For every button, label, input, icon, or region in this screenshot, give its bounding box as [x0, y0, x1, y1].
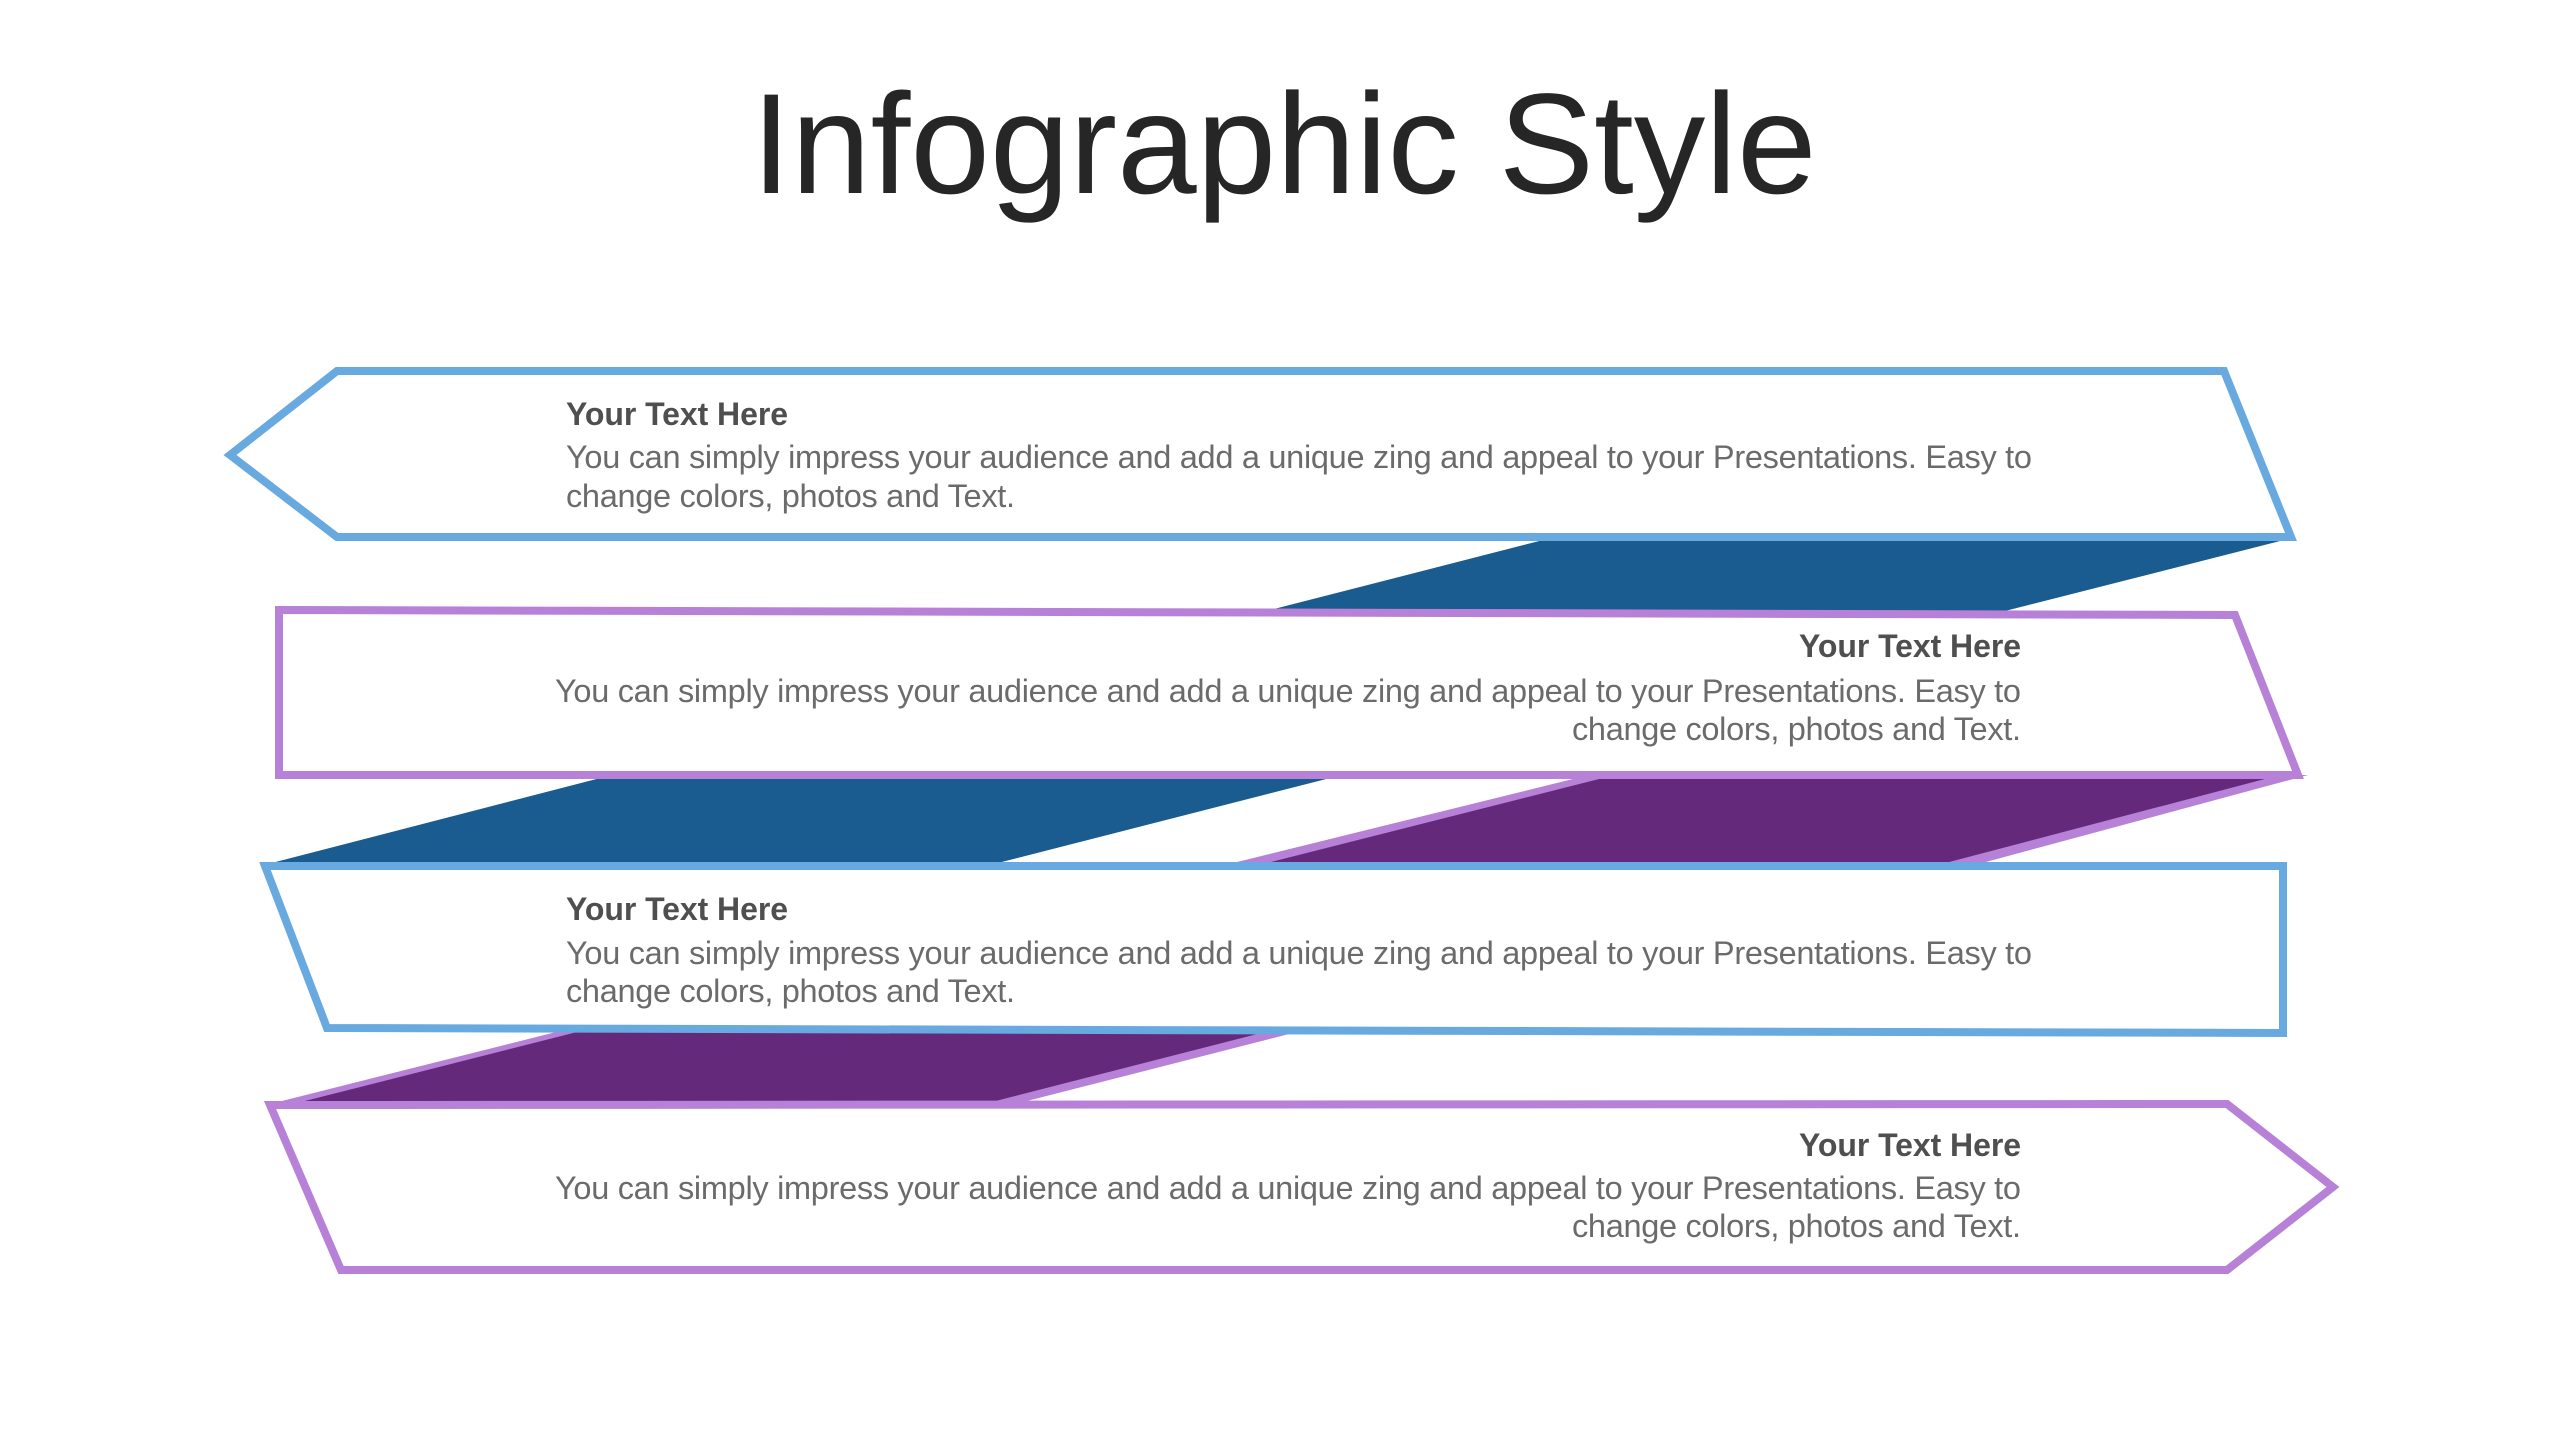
panel 2 body text: change colors, photos and Text. — [1572, 711, 2021, 747]
panel 4 heading: Your Text Here — [1799, 1127, 2021, 1163]
panel 3 body text — [566, 935, 2032, 1009]
panel 1 heading: Your Text Here — [566, 396, 788, 432]
panel 4 body text: change colors, photos and Text. — [1572, 1208, 2021, 1244]
panel 2 body text — [555, 673, 2021, 747]
panel 3 body text: You can simply impress your audience and add a unique zing and appeal to your Presentations. Easy to — [566, 935, 2032, 971]
panel 4 body text: You can simply impress your audience and add a unique zing and appeal to your Presentations. Easy to — [555, 1170, 2021, 1206]
connector: purple fold between panels 2 and 3 — [1221, 775, 2308, 866]
panel 1 body text: You can simply impress your audience and add a unique zing and appeal to your Presentations. Easy to — [566, 439, 2032, 475]
panel 2: purple band — [279, 610, 2298, 775]
connector: dark blue fold between panels 1 and 2 — [1262, 537, 2296, 612]
connector: dark blue fold between panels 2 and 3 — [260, 775, 1342, 866]
title: Infographic Style — [751, 65, 1817, 224]
panel 3 body text: change colors, photos and Text. — [566, 973, 1015, 1009]
panel 1 body text: change colors, photos and Text. — [566, 478, 1015, 514]
connector: purple fold between panels 3 and 4 — [270, 1030, 1305, 1104]
panel 4 body text — [555, 1170, 2021, 1244]
panel 3: blue band — [265, 866, 2283, 1033]
panel 2 heading: Your Text Here — [1799, 628, 2021, 664]
panel 2 body text: You can simply impress your audience and add a unique zing and appeal to your Presentations. Easy to — [555, 673, 2021, 709]
panel 3 heading: Your Text Here — [566, 891, 788, 927]
panel 4: purple right-pointing arrow — [270, 1104, 2333, 1270]
panel 1 body text — [566, 439, 2032, 514]
panel 1: blue left-pointing arrow — [230, 371, 2291, 537]
